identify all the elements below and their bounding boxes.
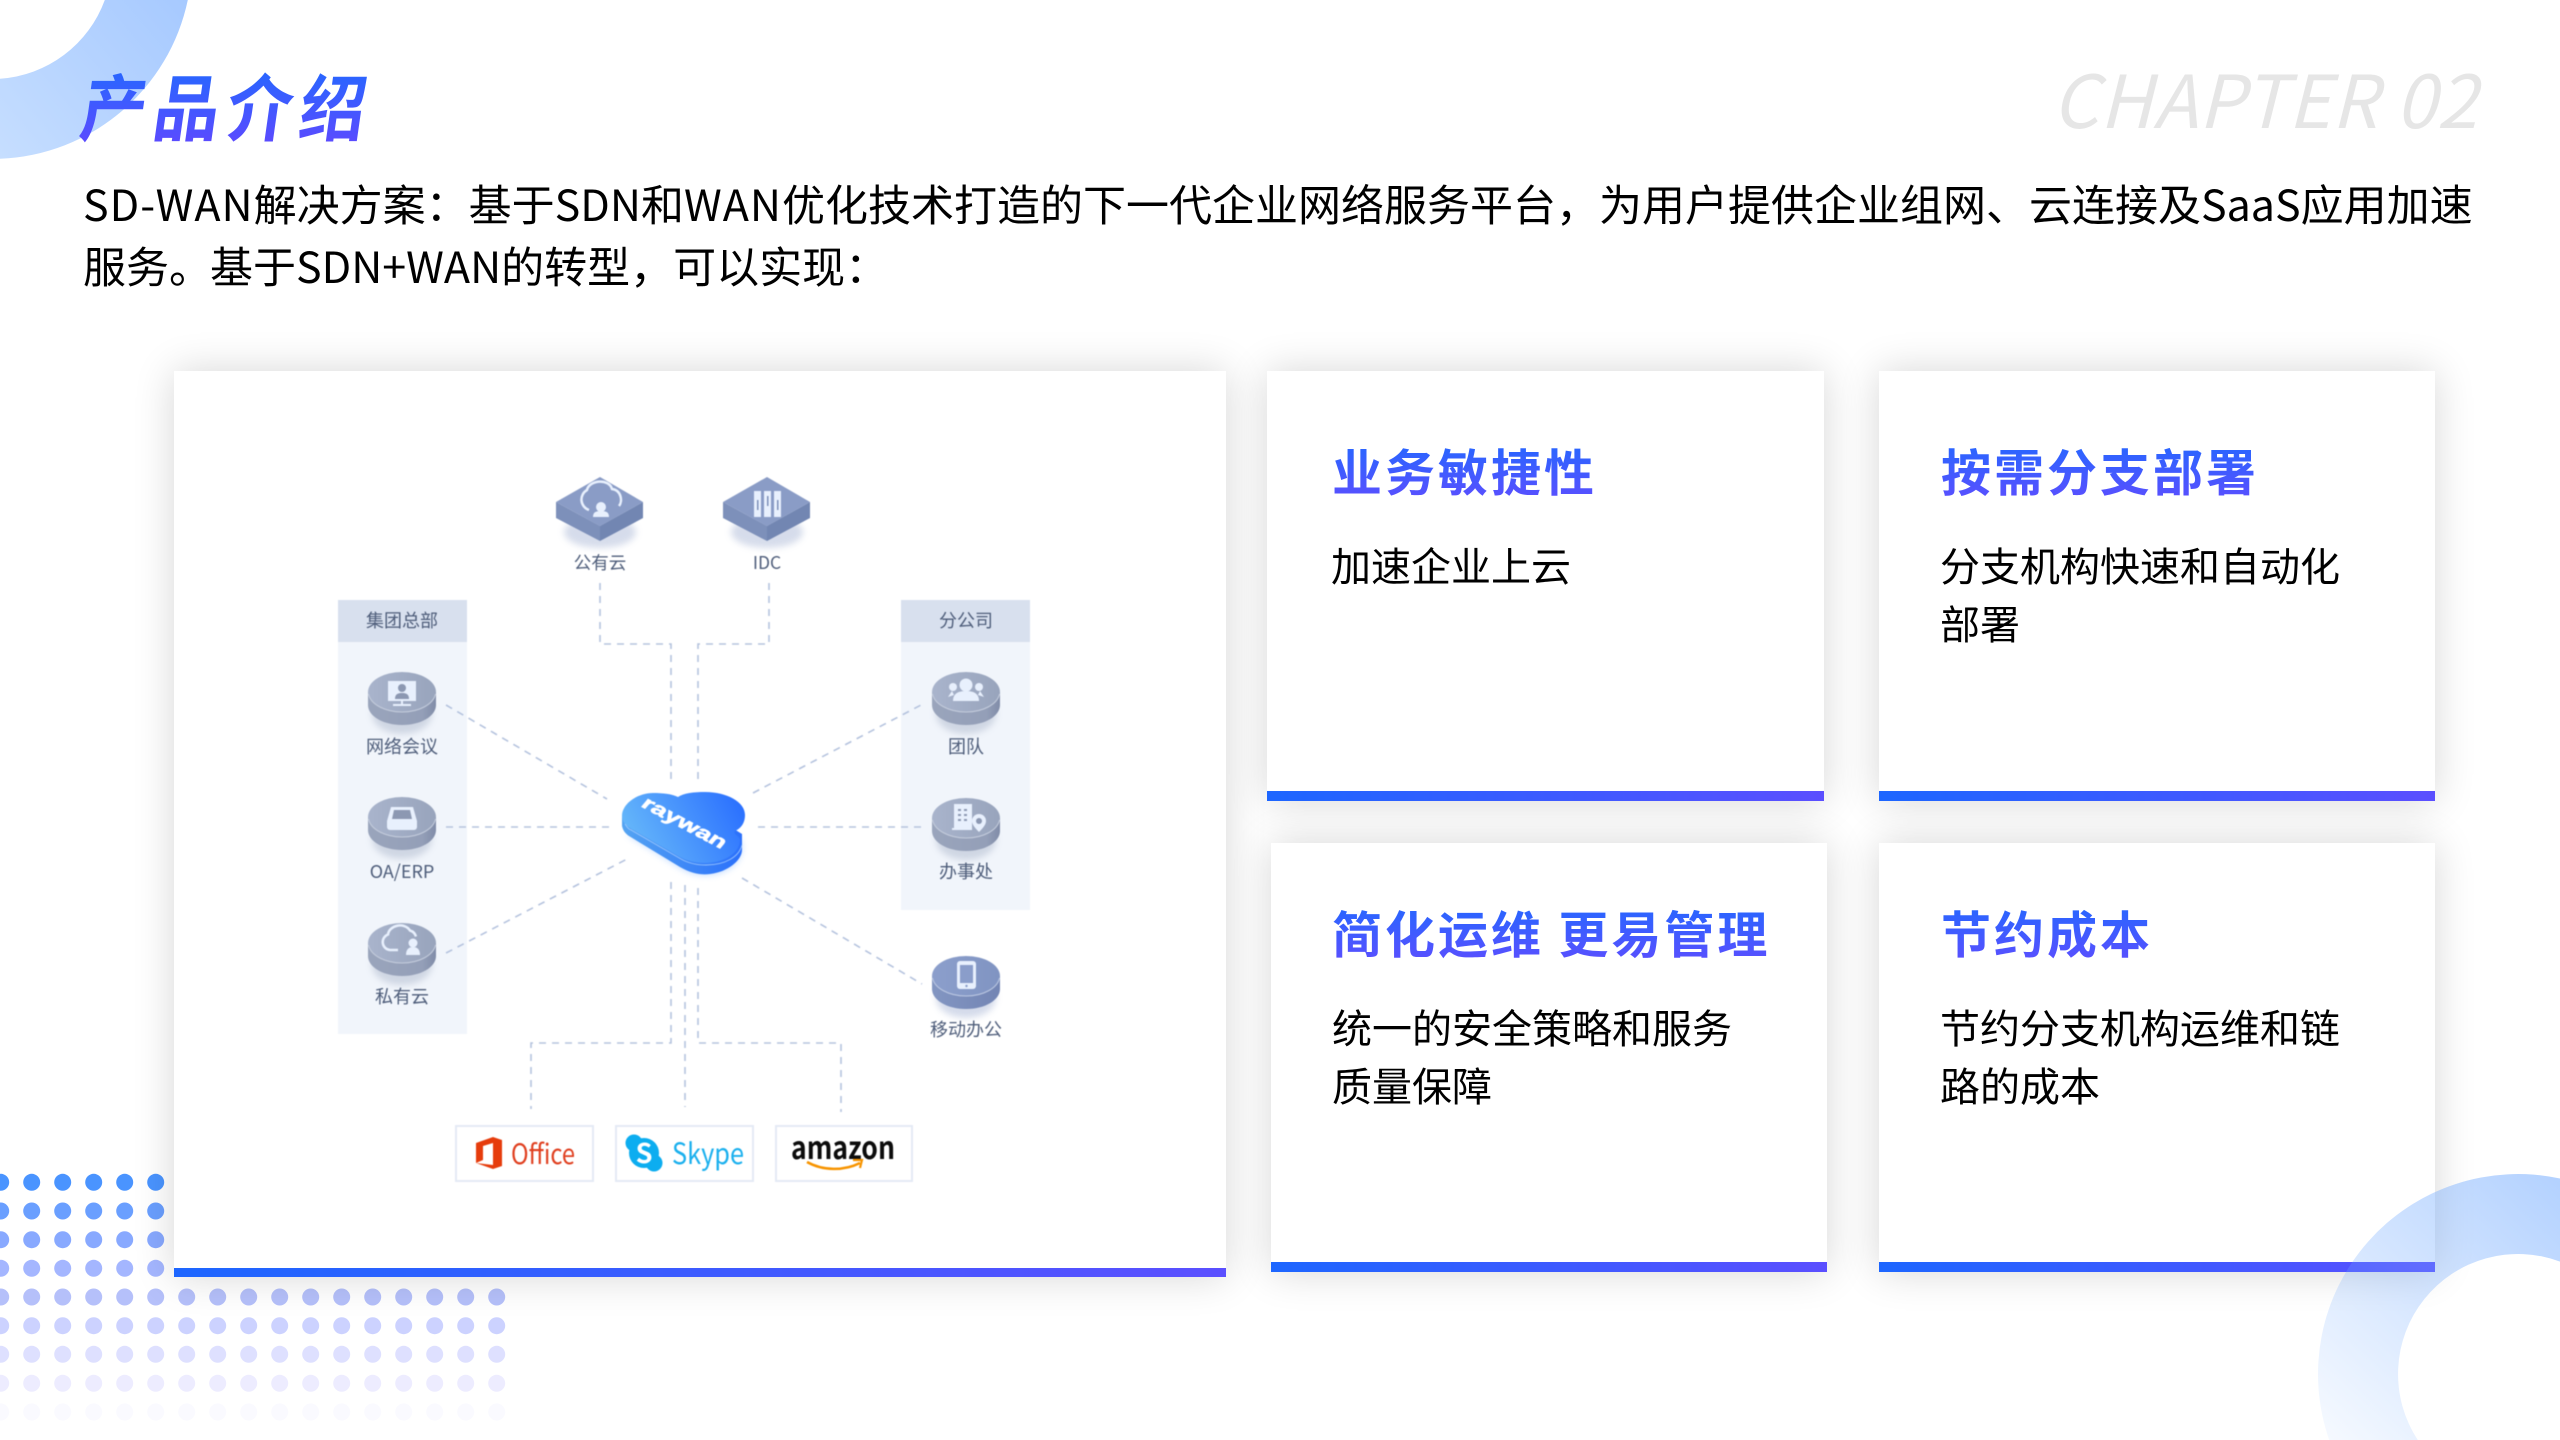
node: office [932, 798, 1000, 884]
card text [1940, 997, 2340, 1113]
logo card: Skype: Skype [672, 1131, 744, 1173]
panel accent bar [174, 1268, 1226, 1277]
card heading: 节约成本 [1941, 896, 2153, 968]
branch header [901, 600, 1030, 642]
card: simplified operations [1271, 843, 1827, 1272]
node: video meeting [366, 672, 438, 759]
card text: 路的成本 [1940, 1055, 2100, 1113]
group heading: 集团总部 [366, 607, 438, 633]
decoration: dot grid [0, 1174, 506, 1392]
node: public cloud: 公有云 [574, 550, 626, 575]
central cloud: raywan [637, 792, 733, 853]
decoration: bottom-right ring [2318, 1174, 2560, 1440]
card heading: 业务敏捷性 [1332, 434, 1597, 506]
card text: 节约分支机构运维和链 [1940, 997, 2340, 1055]
card: business agility [1267, 371, 1824, 801]
node: mobile office: 移动办公 [930, 1016, 1002, 1042]
card text: 部署 [1940, 593, 2020, 651]
logo card: Office: Office [511, 1133, 575, 1173]
logo card: amazon: amazon [791, 1123, 895, 1168]
intro text [83, 172, 2473, 296]
branch heading: 分公司 [939, 607, 993, 633]
node: team: 团队 [948, 733, 984, 759]
intro text: 服务。基于SDN+WAN的转型，可以实现： [83, 234, 888, 296]
node: OA/ERP: OA/ERP [370, 858, 434, 884]
network topology diagram [338, 476, 1030, 1182]
logo card: Office [456, 1126, 593, 1181]
panel: network diagram [174, 371, 1226, 1277]
node: public cloud [556, 477, 643, 575]
card: cost saving [1879, 843, 2435, 1272]
card text: 加速企业上云 [1331, 535, 1571, 593]
intro text: SD-WAN解决方案：基于SDN和WAN优化技术打造的下一代企业网络服务平台，为用户提供企业组网、云连接及SaaS应用加速 [83, 172, 2473, 234]
logo card: amazon [776, 1123, 912, 1181]
group: headquarters [338, 600, 467, 1034]
card text: 统一的安全策略和服务 [1332, 997, 1732, 1055]
node: mobile office [930, 956, 1002, 1042]
connector lines [446, 583, 923, 1112]
group body [338, 600, 467, 1034]
node: IDC: IDC [753, 550, 781, 575]
card text [1332, 997, 1732, 1113]
group: branch offices [901, 600, 1030, 910]
card heading: 简化运维 更易管理 [1332, 896, 1770, 968]
card text [1940, 535, 2340, 651]
node: private cloud [368, 923, 436, 1009]
logo card: Skype: S [636, 1132, 652, 1171]
node: OA/ERP [368, 797, 436, 884]
logo card: Skype [616, 1126, 753, 1181]
central cloud [622, 792, 745, 875]
chapter label: CHAPTER 02 [2052, 44, 2478, 150]
card text: 质量保障 [1332, 1055, 1492, 1113]
group header [338, 600, 467, 642]
title: 产品介绍 [75, 51, 381, 157]
node: team [932, 672, 1000, 759]
node: video meeting: 网络会议 [366, 733, 438, 759]
decoration: top-left ring [0, 0, 188, 159]
card text: 分支机构快速和自动化 [1940, 535, 2340, 593]
card heading: 按需分支部署 [1941, 434, 2259, 506]
node: office: 办事处 [939, 858, 993, 884]
card: on-demand branch deployment [1879, 371, 2435, 801]
branch body [901, 600, 1030, 910]
node: private cloud: 私有云 [375, 983, 429, 1009]
node: IDC [723, 477, 810, 575]
